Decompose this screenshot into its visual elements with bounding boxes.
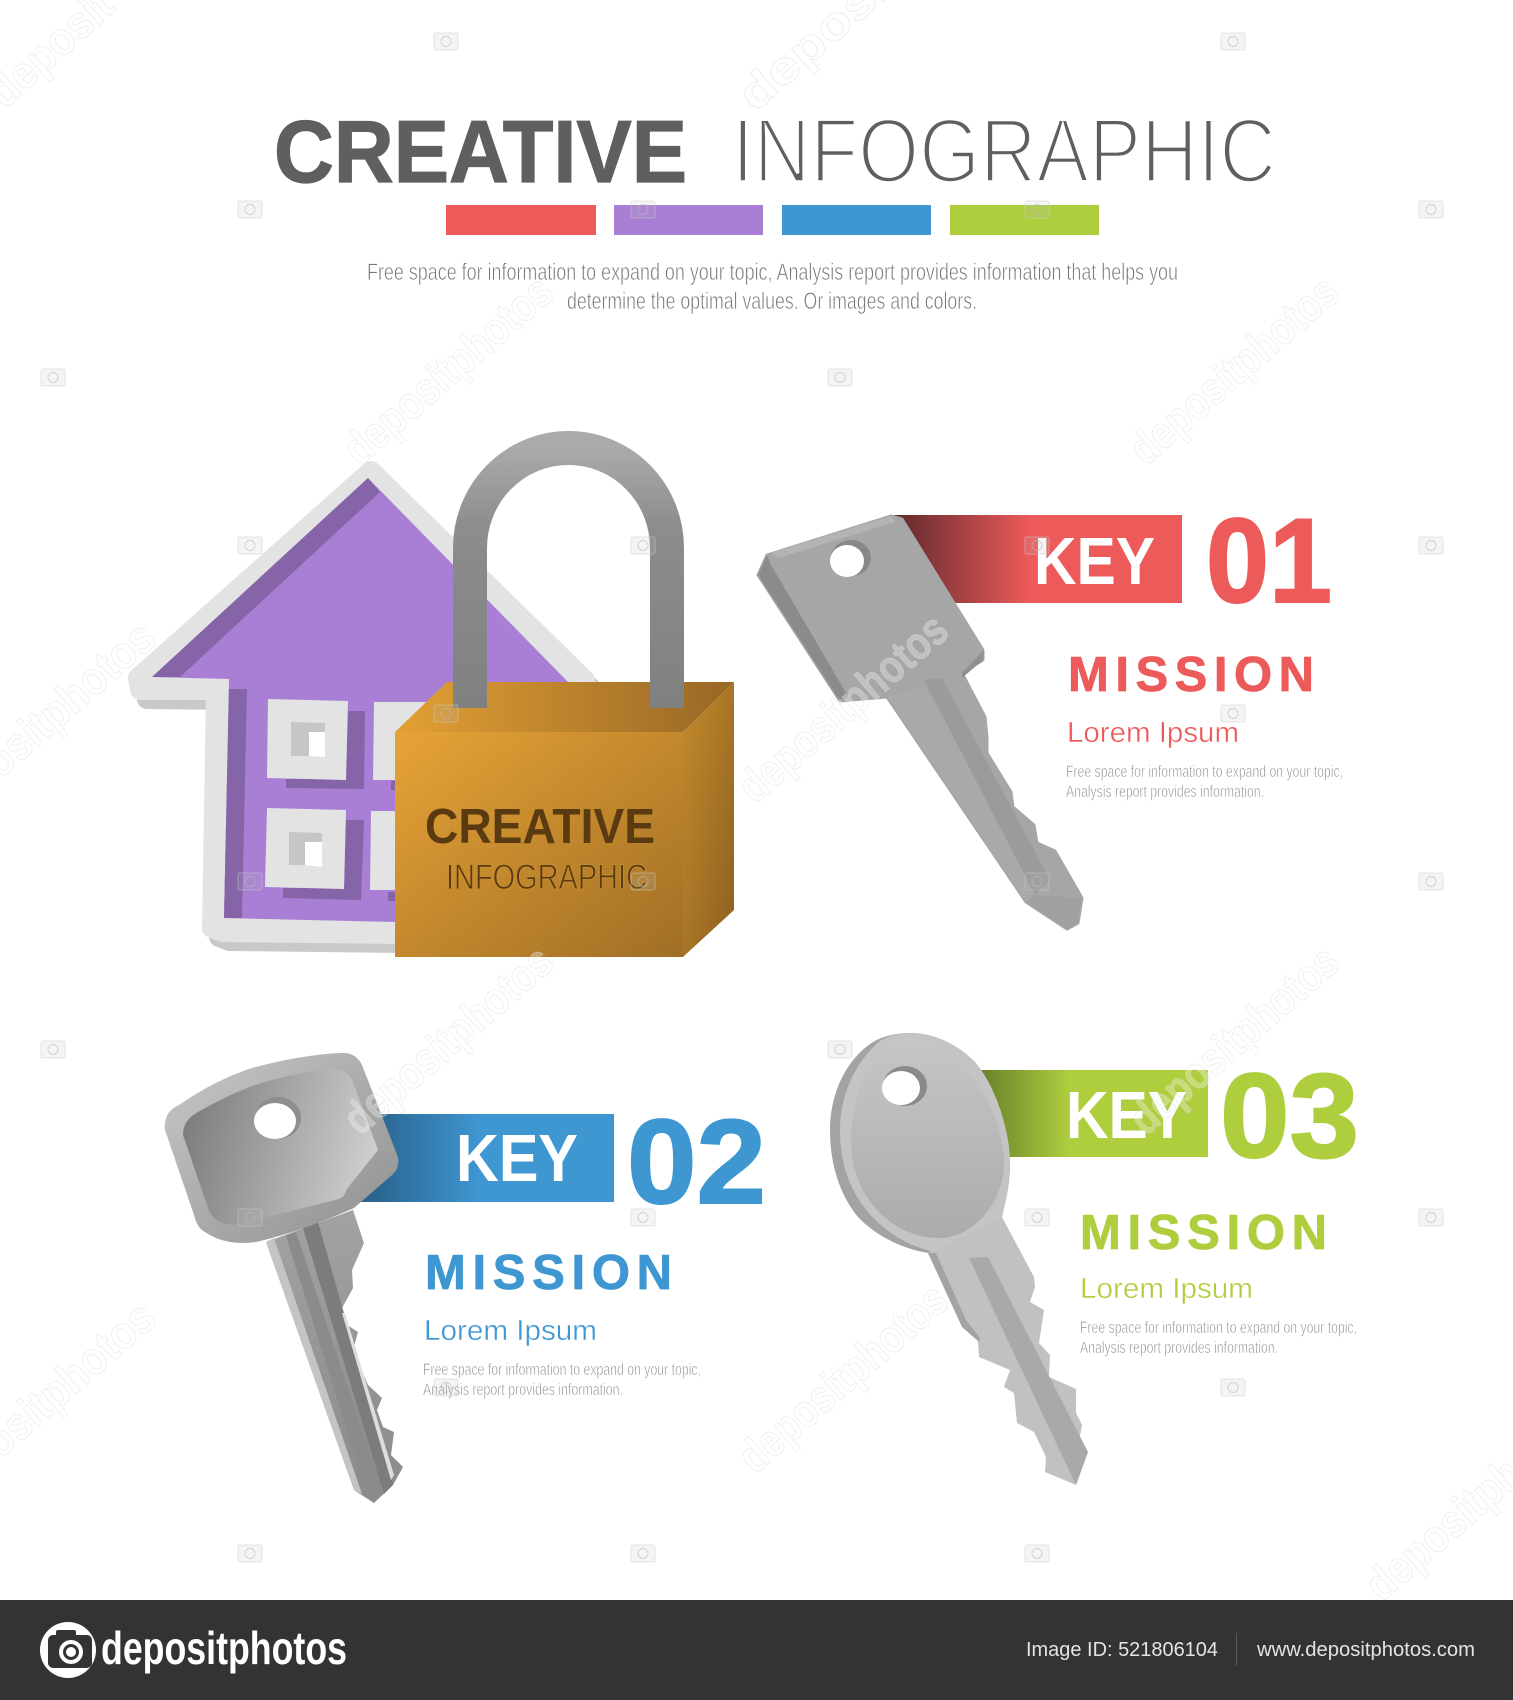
image id: Image ID: 521806104 [1026, 1639, 1218, 1661]
icon: house [138, 471, 592, 943]
heading: key 01: KEY [1034, 524, 1155, 599]
text block: key 01: Free space for information to expand on your topic, [1066, 762, 1343, 781]
watermarks: depositphotos [332, 935, 563, 1145]
website: www.depositphotos.com [1256, 1639, 1475, 1661]
text block: key 01: Analysis report provides information. [1066, 782, 1264, 801]
icon: camera logo [40, 1622, 96, 1678]
banner: key 03 [978, 1070, 1208, 1157]
padlock label: CREATIVE [425, 800, 655, 854]
footer bar [0, 1600, 1513, 1700]
icon: key 03 [830, 1033, 1088, 1485]
text block: key 02 [423, 1360, 701, 1399]
panel: key 01 [758, 494, 1343, 929]
padlock shackle [470, 448, 667, 708]
icon: key 02 [165, 1053, 403, 1503]
heading: key 02: KEY [456, 1121, 578, 1196]
watermarks: depositphotos [727, 603, 958, 813]
text block: key 01 [1066, 762, 1343, 801]
subheading: key 01: Lorem Ipsum [1067, 717, 1239, 749]
number: 01: 01 [1206, 494, 1332, 628]
watermarks: depositphotos [332, 265, 563, 475]
key 03 head face [851, 1038, 1004, 1238]
watermarks: depositphotos [1118, 935, 1349, 1145]
banner: key 01 [893, 515, 1182, 603]
text block: key 03: Free space for information to expand on your topic, [1080, 1318, 1357, 1337]
panel: key 03 [830, 1033, 1359, 1485]
padlock front face [395, 732, 683, 957]
watermarks: depositphotos [727, 1273, 958, 1483]
icon: key 01 [758, 516, 1082, 929]
logo wordmark: depositphotos [101, 1622, 347, 1674]
mission heading: key 02: MISSION [425, 1246, 672, 1300]
title [274, 101, 1276, 202]
text block: key 02: Free space for information to expand on your topic, [423, 1360, 701, 1379]
number: 03: 03 [1220, 1049, 1359, 1183]
subheading: key 03: Lorem Ipsum [1080, 1273, 1253, 1305]
key 03 head side [830, 1033, 1010, 1253]
padlock label [425, 800, 655, 897]
mission heading: key 03: MISSION [1080, 1206, 1327, 1260]
icon: padlock [395, 448, 734, 957]
heading: key 03: KEY [1066, 1078, 1187, 1153]
subheading: key 02: Lorem Ipsum [424, 1315, 597, 1347]
key 03 blade [928, 1217, 1088, 1485]
panel: key 02 [165, 1053, 766, 1503]
mission heading: key 01: MISSION [1068, 648, 1314, 702]
subtitle: Free space for information to expand on your topic, Analysis report provides information that helps you [367, 259, 1178, 286]
text block: key 02: Analysis report provides information. [423, 1380, 623, 1399]
text block: key 03: Analysis report provides information. [1080, 1338, 1278, 1357]
banner: key 02 [360, 1114, 614, 1202]
title: INFOGRAPHIC [732, 101, 1276, 202]
key 03 head rim [840, 1033, 1010, 1252]
padlock label: INFOGRAPHIC [446, 858, 647, 897]
colour bars [446, 205, 1099, 235]
title: CREATIVE [274, 102, 687, 201]
subtitle [367, 259, 1178, 315]
watermarks: depositphotos [1118, 265, 1349, 475]
number: 02: 02 [627, 1095, 766, 1229]
subtitle: determine the optimal values. Or images and colors. [567, 288, 977, 315]
padlock right face [683, 682, 734, 957]
padlock top face [395, 682, 734, 732]
text block: key 03 [1080, 1318, 1357, 1357]
